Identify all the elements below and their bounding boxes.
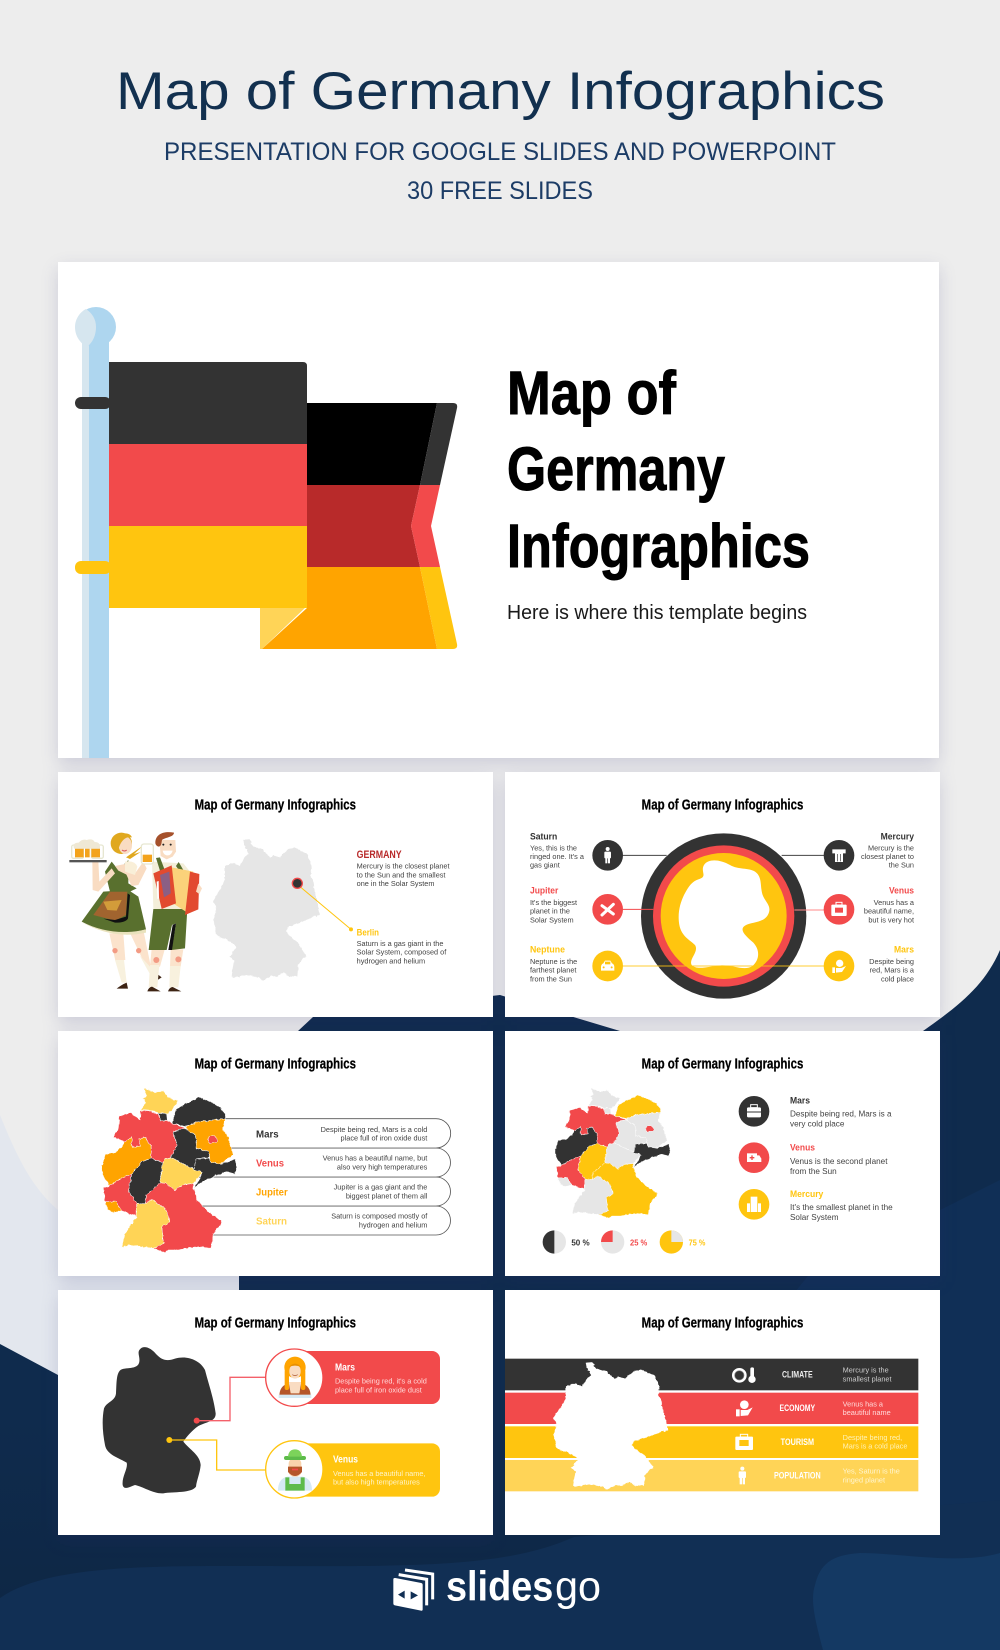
- row text: population: POPULATION: [774, 1471, 821, 1481]
- text: Saturn: Saturn: [530, 832, 558, 842]
- text: Neptune: Neptune is the: [530, 957, 577, 966]
- text: Mars: [869, 945, 915, 983]
- text: Jupiter: Jupiter: [530, 885, 559, 895]
- text: Jupiter: It's the biggest: [530, 898, 577, 907]
- callout: Venus: [294, 1443, 440, 1497]
- text: Saturn: [530, 832, 585, 870]
- icon: thermometer and sun: [732, 1367, 756, 1383]
- item: Venus: [790, 1143, 888, 1176]
- panel: colour bands slide: [505, 1290, 940, 1535]
- slide heading: Map of Germany Infographics: [195, 1056, 356, 1072]
- row: Saturn: Saturn is composed mostly of: [331, 1212, 428, 1221]
- connector: red: [194, 1377, 267, 1424]
- pie: 25 percent: [601, 1230, 648, 1254]
- row text: economy: Venus has a: [843, 1399, 884, 1408]
- text: Germany: GERMANY: [357, 849, 402, 861]
- text: Berlin: Saturn is a gas giant in the: [357, 939, 443, 948]
- icon: Saturn person: [592, 840, 623, 871]
- callout: Mars: Mars: [335, 1362, 355, 1373]
- panel: percentages slide: [505, 1031, 940, 1276]
- callout: Mars: [294, 1351, 440, 1404]
- slide count: 30 FREE SLIDES: [407, 177, 593, 205]
- text: Neptune: Neptune: [530, 945, 565, 955]
- panel: states and pills slide: [58, 1031, 493, 1276]
- icon: woman avatar: [266, 1349, 323, 1406]
- icon: German flag on pole: [75, 307, 457, 758]
- text: Neptune: [530, 945, 577, 983]
- item: Venus: from the Sun: [790, 1167, 837, 1176]
- callout: Mars: place full of iron oxide dust: [335, 1385, 422, 1394]
- item: Mercury: Mercury: [790, 1189, 824, 1199]
- text: Venus: Venus has a: [874, 898, 915, 907]
- panel: ring diagram slide: [505, 772, 940, 1017]
- row: Mars: place full of iron oxide dust: [341, 1134, 427, 1143]
- row: Jupiter: [256, 1183, 428, 1200]
- text: Neptune: farthest planet: [530, 966, 576, 975]
- row text: population: [774, 1467, 900, 1484]
- row: Jupiter: Jupiter: [256, 1188, 288, 1199]
- page title: Map of Germany Infographics: [116, 62, 885, 121]
- heading: main title: Map of: [507, 359, 677, 427]
- row text: tourism: [781, 1433, 907, 1451]
- icon: briefcase: [739, 1096, 769, 1127]
- text: Mars: red, Mars is a: [870, 966, 915, 975]
- pie: 75 percent: 75 %: [689, 1238, 706, 1248]
- band: economy: [505, 1393, 918, 1424]
- text: Mars: cold place: [881, 974, 914, 983]
- icon: suitcase: [735, 1434, 753, 1450]
- icon: Neptune car: [592, 951, 623, 981]
- illustration: woman with beer tray: [69, 833, 162, 989]
- heading: main title: [507, 359, 810, 580]
- icon: ambulance: [739, 1142, 769, 1173]
- illustration: man with accordion: [141, 832, 202, 991]
- text: Berlin: Berlin: [357, 928, 379, 938]
- text: Mercury: the Sun: [889, 861, 914, 870]
- slide heading: Map of Germany Infographics: [642, 797, 803, 813]
- pie: 25 percent: 25 %: [630, 1238, 648, 1248]
- text: Venus: [864, 885, 915, 924]
- map: states coloured by share: [555, 1088, 671, 1218]
- icon: Mars money hand: [824, 951, 854, 981]
- row text: population: ringed planet: [843, 1475, 885, 1484]
- map: Germany silhouette with Berlin marker: [213, 839, 353, 981]
- connector: yellow: [166, 1437, 267, 1470]
- pie: 50 percent: 50 %: [571, 1238, 590, 1248]
- text: Saturn: ringed one. It's a: [530, 852, 585, 861]
- callout: Venus: Venus: [333, 1455, 358, 1466]
- text: Berlin: [357, 928, 447, 965]
- text: Germany: to the Sun and the smallest: [357, 870, 445, 879]
- item: Venus: Venus: [790, 1143, 815, 1153]
- text: Venus: beautiful name,: [864, 907, 914, 916]
- text: Germany: Mercury is the closest planet: [357, 862, 450, 871]
- text: Neptune: from the Sun: [530, 974, 572, 983]
- slide heading: Map of Germany Infographics: [195, 797, 356, 813]
- connector lines: [623, 855, 825, 966]
- chart: concentric rings with map: [641, 833, 806, 999]
- panel: Berlin slide: [58, 772, 493, 1017]
- row text: tourism: TOURISM: [781, 1437, 814, 1447]
- text: Venus: but is very hot: [868, 915, 914, 924]
- row text: population: Yes, Saturn is the: [843, 1467, 900, 1476]
- row text: climate: Mercury is the: [843, 1366, 889, 1375]
- text: Mars: Despite being: [869, 957, 914, 966]
- text: Berlin: Solar System, composed of: [357, 948, 447, 957]
- slide heading: Map of Germany Infographics: [642, 1056, 803, 1072]
- row text: economy: ECONOMY: [779, 1403, 815, 1413]
- slide shadows: [58, 268, 940, 1541]
- outlined rows: [193, 1119, 451, 1235]
- text: Venus: Venus: [889, 885, 914, 895]
- callout: Venus: Venus has a beautiful name,: [333, 1469, 425, 1478]
- row: Jupiter: Jupiter is a gas giant and the: [334, 1183, 427, 1192]
- row: Mars: Despite being red, Mars is a cold: [321, 1125, 427, 1134]
- text: Saturn: gas giant: [530, 861, 560, 870]
- heading: main title: Germany: [507, 435, 725, 503]
- row text: climate: [782, 1366, 892, 1383]
- row: Mars: [256, 1125, 427, 1143]
- row: Saturn: [256, 1212, 428, 1229]
- wordmark: slides: [446, 1563, 553, 1610]
- row: Saturn: Saturn: [256, 1217, 287, 1228]
- text: Jupiter: planet in the: [530, 907, 570, 916]
- row text: tourism: Mars is a cold place: [843, 1442, 907, 1451]
- panel: main title slide: [58, 262, 939, 758]
- logo: slidesgo: [393, 1563, 601, 1611]
- callout: Venus: but also high temperatures: [333, 1478, 420, 1487]
- icon: Jupiter tools: [592, 894, 623, 925]
- item: Venus: Venus is the second planet: [790, 1157, 888, 1166]
- text: Mercury: closest planet to: [861, 852, 914, 861]
- text: Germany: one in the Solar System: [357, 879, 434, 888]
- row: Mars: Mars: [256, 1130, 279, 1141]
- panel: callouts slide: [58, 1290, 493, 1535]
- text: Saturn: Yes, this is the: [530, 843, 577, 852]
- text: Berlin: hydrogen and helium: [357, 956, 425, 965]
- logo: slidesgo: go: [555, 1563, 601, 1610]
- row: Saturn: hydrogen and helium: [359, 1220, 427, 1229]
- text: Mercury: Mercury is the: [868, 843, 914, 852]
- band: climate: [505, 1359, 918, 1390]
- icon: person: [739, 1467, 746, 1484]
- icon: money hand: [736, 1400, 753, 1416]
- map: coloured German states: [102, 1088, 237, 1253]
- band: tourism: [505, 1426, 918, 1458]
- slide heading: Map of Germany Infographics: [642, 1316, 803, 1332]
- band: population: [505, 1460, 918, 1491]
- row: Venus: Venus: [256, 1159, 284, 1170]
- map: white Germany silhouette: [553, 1362, 668, 1489]
- item: Mercury: It's the smallest planet in the: [790, 1203, 893, 1212]
- item: Mars: [790, 1095, 892, 1129]
- pie: 75 percent: [660, 1230, 706, 1254]
- text: Mars: Mars: [894, 945, 914, 955]
- item: Mars: Mars: [790, 1095, 810, 1105]
- text: Mercury: [861, 832, 915, 870]
- icon: hotel: [739, 1189, 769, 1220]
- text: Jupiter: [530, 885, 577, 924]
- slide heading: Map of Germany Infographics: [195, 1316, 356, 1332]
- row text: climate: smallest planet: [843, 1374, 892, 1383]
- heading: main title: Infographics: [507, 512, 810, 580]
- subheading: Here is where this template begins: [507, 602, 807, 624]
- pie: 50 percent: [543, 1230, 590, 1254]
- item: Mercury: Solar System: [790, 1213, 839, 1222]
- map: dark smooth silhouette: [103, 1347, 216, 1493]
- row text: economy: [779, 1399, 891, 1417]
- item: Mercury: [790, 1189, 893, 1222]
- icon: Mercury column: [824, 840, 854, 871]
- subtitle: PRESENTATION FOR GOOGLE SLIDES AND POWERPOINT: [164, 138, 836, 166]
- text: Jupiter: Solar System: [530, 915, 574, 924]
- icon: man avatar: [266, 1441, 323, 1498]
- row text: tourism: Despite being red,: [843, 1433, 902, 1442]
- icon: Venus suitcase: [824, 894, 854, 925]
- row text: climate: CLIMATE: [782, 1369, 813, 1379]
- text: Mercury: Mercury: [881, 832, 915, 842]
- item: Mars: Despite being red, Mars is a: [790, 1110, 892, 1119]
- text: Germany: [357, 849, 450, 888]
- row: Jupiter: biggest planet of them all: [346, 1191, 428, 1200]
- icon: stacked slides: [393, 1570, 433, 1611]
- row: Venus: [256, 1154, 428, 1171]
- row text: economy: beautiful name: [843, 1408, 891, 1417]
- item: Mars: very cold place: [790, 1120, 845, 1129]
- row: Venus: also very high temperatures: [337, 1162, 428, 1171]
- callout: Mars: Despite being red, it's a cold: [335, 1377, 427, 1386]
- row: Venus: Venus has a beautiful name, but: [323, 1154, 427, 1163]
